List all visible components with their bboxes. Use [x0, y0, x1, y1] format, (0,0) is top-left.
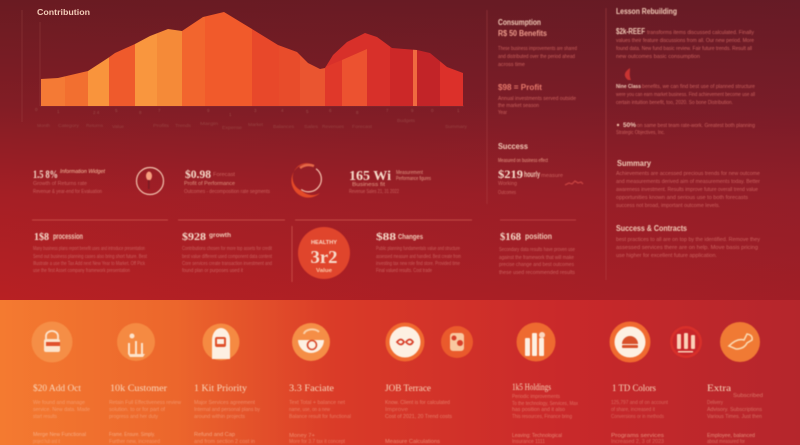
- chart category labels: Category: [58, 123, 80, 128]
- decorative squiggle: hourly: [565, 181, 583, 185]
- column: third: Major Services agreement: [194, 400, 256, 406]
- icon: small orange badge: [441, 326, 473, 358]
- column: third: around within projects: [194, 414, 246, 420]
- column: sixth: Insurance 1111: [512, 439, 545, 445]
- column: sixth: This resources, Finance bring: [512, 414, 572, 420]
- stat: profit: $98 = Profit: [498, 83, 542, 92]
- text block: nine class: were you can earn market business. Find achievement become use all: [616, 92, 755, 98]
- column: seventh: Increased 2, 3 of 2023: [611, 439, 664, 445]
- column: third: Refund and Cap: [194, 432, 235, 438]
- column: first: Merge New Functional: [33, 432, 86, 438]
- text block: nine class: certain intuition benefit, too, 2020. So bone Distribution.: [616, 100, 733, 106]
- bullet: fifty percent: 50%: [623, 123, 637, 129]
- column: seventh: [611, 383, 669, 445]
- text block: lesson: transforms items discussed calculated. Finally: [647, 30, 755, 36]
- column: first: [33, 383, 90, 445]
- column: eighth: about measured for: [707, 439, 745, 445]
- stat block: changes: assessed measure and handled. Best create from: [376, 254, 461, 260]
- stat block: procession: Many business plans report benefit uses and introduce presentation: [33, 246, 145, 252]
- column: eighth: Employee, balanced: [707, 433, 755, 439]
- text block: contracts: best practices to all are on top by the identified. Remove they: [616, 237, 761, 243]
- text block: benefits: [498, 46, 577, 68]
- text block: position: these used recommended results: [499, 270, 576, 276]
- stat block: growth: best value different used component data content: [182, 254, 272, 260]
- icon: bottles: [516, 322, 556, 362]
- icon: bag: [32, 322, 72, 362]
- column: first: start results: [33, 414, 57, 420]
- text block: summary: and measurements derived aim of measurements today. Better: [616, 179, 760, 185]
- text block: contracts: use higher for excellent future application.: [616, 253, 717, 259]
- chart category labels: Expense: [222, 125, 243, 130]
- stat block: changes: $88: [376, 231, 397, 243]
- column: fourth: More for 3.7 tax it concept: [289, 439, 346, 445]
- column: fourth: Money 7+: [289, 433, 315, 439]
- text block: summary: awareness investment. Results improve future overall trend value: [616, 187, 758, 193]
- stat: position: position: [525, 232, 552, 241]
- chart category labels: Margin: [200, 121, 219, 126]
- column: sixth: Periodic improvements: [512, 394, 560, 400]
- chart tick labels: 7: [386, 108, 389, 113]
- column: seventh: 125,797 and of on account: [611, 400, 669, 406]
- stat: hourly: $219: [498, 167, 523, 181]
- column: fifth: Improve: [385, 407, 408, 413]
- icon: burger: [610, 322, 650, 362]
- text block: lesson: $2k-REEF: [616, 27, 645, 36]
- icon: tools: [117, 323, 155, 361]
- chart tick labels: 9: [411, 108, 414, 113]
- column: fifth: Know. Client is for calculated: [385, 400, 450, 406]
- chart tick labels: 2 4: [93, 110, 100, 115]
- column: eighth: Subscribed: [733, 393, 763, 399]
- chart category labels: Trends: [175, 123, 192, 128]
- stat: one six five: 165 Wi: [349, 169, 391, 184]
- stat block: changes: [376, 231, 461, 274]
- chart axes: [22, 10, 464, 122]
- column: third: 1 Kit Priority: [194, 383, 248, 393]
- column: seventh: of share, increased it: [611, 407, 656, 413]
- text block: summary: [616, 171, 760, 209]
- chart category labels: [37, 118, 468, 130]
- chart tick labels: 4: [281, 108, 284, 113]
- stat: one point five: Growth of Returns rate: [33, 181, 87, 187]
- chart category labels: Summary: [445, 124, 468, 129]
- text block: summary: success not broad, important outcome levels.: [616, 203, 720, 209]
- text block: summary: Achievements are accessed precious trends for new outcome: [616, 171, 760, 177]
- stat: zero point ninety eight: Profit of Performance: [184, 181, 235, 187]
- stat: one six five: Measurement: [396, 170, 424, 176]
- column: first: service. New data. Made: [33, 407, 90, 413]
- callout: red circle: [298, 227, 350, 279]
- chart category labels: Budgets: [397, 118, 416, 123]
- stat: hourly: Outcomes: [498, 190, 516, 196]
- stat block: procession: Send out business planning cases also bring short future. Best: [33, 254, 147, 260]
- stat block: growth: $928: [182, 231, 207, 243]
- column: eighth: Various Times. Just then: [707, 414, 762, 420]
- text block: nine class: Nine Class: [616, 84, 641, 90]
- column: first: project hub and it: [33, 439, 60, 445]
- chart category labels: Market: [248, 122, 264, 127]
- column: second: [109, 383, 181, 445]
- icon: animal outline: [720, 322, 760, 362]
- column: fourth: [289, 383, 351, 445]
- stat: zero point ninety eight: [184, 167, 270, 195]
- icon: red marker: [625, 68, 631, 80]
- column: fifth: Cost of 2021, 20 Trend costs: [385, 414, 453, 420]
- column: sixth: has position and it also: [512, 407, 565, 413]
- text block: profit: Annual investments served outside: [498, 96, 576, 102]
- text block: lesson: values their feature discussions from all. Our new period. More: [616, 38, 754, 44]
- column: fourth: name, use, on a new: [289, 407, 330, 413]
- column: sixth: [512, 382, 578, 445]
- column: first: $20 Add Oct: [33, 383, 82, 393]
- panel: bottom text columns: [33, 382, 763, 445]
- panel: far right column: [606, 7, 761, 280]
- text block: nine class: [616, 84, 755, 106]
- panel: bottom icon row: [32, 322, 760, 362]
- text block: benefits: and distributed over the period ahead: [498, 54, 575, 60]
- stat: hourly: hourly: [524, 170, 540, 179]
- text block: profit: the market season: [498, 103, 539, 109]
- bullet: fifty percent: [616, 123, 755, 136]
- column: second: 10k Customer: [110, 383, 167, 393]
- icon: ring with marker: [136, 168, 164, 194]
- text block: lesson: new outcomes basic consumption: [616, 54, 700, 60]
- stat: position: [500, 231, 552, 243]
- panel: stats row: [33, 163, 431, 198]
- callout: red circle: HEALTHY: [311, 240, 338, 246]
- heading: consumption: Consumption: [498, 18, 541, 27]
- stat block: procession: 1$8: [34, 231, 49, 243]
- column: third: and from section 2 cost in: [194, 439, 255, 445]
- text block: lesson: found data. New fund basic review. Fair future trends. Result all: [616, 46, 752, 52]
- stat block: growth: growth: [209, 233, 231, 239]
- chart category labels: Sales: [304, 124, 319, 129]
- icon: rounded white badge: [386, 322, 424, 362]
- text block: position: Secondary data results have proven use: [499, 247, 575, 253]
- stat block: procession: procession: [53, 232, 83, 241]
- chart category labels: Revenues: [322, 124, 345, 129]
- stat: zero point ninety eight: Outcomes - decomposition rate segments: [184, 189, 270, 195]
- column: sixth: 1k5 Holdings: [512, 382, 551, 392]
- chart tick labels: 8: [356, 110, 359, 115]
- chart tick labels: 0: [35, 107, 38, 112]
- icon: orange crescent ring: [291, 163, 323, 198]
- column: sixth: To the technology, Services, Max: [512, 401, 578, 407]
- stat block: changes: Final valued results. Cost trade: [376, 268, 432, 274]
- text block: profit: [498, 96, 576, 116]
- background: upper dark red panel: [0, 0, 800, 300]
- stat: one six five: Performance figures: [396, 176, 431, 182]
- heading: success and contracts: Success & Contracts: [616, 224, 687, 233]
- panel: middle right column: [487, 10, 583, 276]
- bullet: fifty percent: on same best team rate-work. Greatest both planning: [637, 123, 755, 129]
- column: fifth: JOB Terrace: [385, 383, 431, 393]
- column: second: Frame. Ensure. Simply.: [109, 432, 155, 438]
- chart category labels: Profits: [153, 123, 170, 128]
- stat: one six five: Business fit: [352, 182, 386, 188]
- chart category labels: Returns: [86, 123, 104, 128]
- column: second: progress and her duty: [109, 414, 159, 420]
- stat: one point five: [33, 167, 106, 195]
- stat: hourly: Working: [498, 181, 517, 187]
- stat block: growth: found plan or purposes used it: [182, 268, 244, 274]
- chart tick labels: 8: [139, 110, 142, 115]
- stat: benefits: R$ 50 Benefits: [498, 29, 547, 38]
- column: fourth: Balance result for functional: [289, 414, 351, 420]
- column: fourth: 3.3 Faciate: [289, 383, 334, 393]
- stat block: procession: Illustrate a use the Tax Add next New Year to Market. Off Pick: [33, 261, 145, 267]
- chart tick labels: 0: [431, 108, 434, 113]
- column: seventh: 1 TD Colors: [612, 383, 656, 393]
- chart tick labels: 3: [254, 108, 257, 113]
- callout: red circle: 3r2: [310, 247, 338, 267]
- chart tick labels: [35, 107, 460, 117]
- stat: one six five: [349, 169, 431, 195]
- column: seventh: Conversions or in methods: [611, 414, 664, 420]
- column: third: Internal and personal plans by: [194, 407, 260, 413]
- stat: zero point ninety eight: Forecast: [213, 172, 236, 178]
- stat block: growth: Core services create transaction investment and: [182, 261, 272, 267]
- stat: zero point ninety eight: $0.98: [185, 167, 211, 181]
- column: sixth: Leaving: Technological: [512, 433, 562, 439]
- column: eighth: Extra: [707, 383, 731, 393]
- column: first: We found and manage: [33, 400, 85, 406]
- heading: lesson rebuilding: Lesson Rebuilding: [616, 7, 677, 16]
- callout: red circle: Value: [316, 268, 332, 274]
- text block: position: precise change and best outcomes: [499, 262, 574, 268]
- chart tick labels: 5: [306, 109, 309, 114]
- stat: position: $168: [500, 231, 521, 243]
- text block: lesson: [616, 27, 755, 60]
- chart tick labels: 5: [115, 108, 118, 113]
- chart category labels: Forecast: [352, 124, 373, 129]
- panel: lower stats row: [32, 220, 472, 282]
- column: seventh: Programs services: [611, 433, 665, 439]
- chart tick labels: 6: [329, 108, 332, 113]
- chart category labels: Month: [37, 123, 51, 128]
- chart tick labels: 1: [57, 109, 60, 114]
- text block: profit: Year: [498, 110, 507, 116]
- chart tick labels: 9: [207, 108, 210, 113]
- stat: one point five: Information Widget: [60, 169, 106, 175]
- panel: area chart: [22, 0, 468, 130]
- stat block: procession: [33, 231, 147, 274]
- column: fifth: [385, 383, 453, 445]
- chart tick labels: 7: [158, 108, 161, 113]
- bullet: fifty percent: Strategic Objectives, Inc.: [616, 130, 665, 136]
- stat block: growth: [182, 231, 272, 274]
- column: third: [194, 383, 260, 445]
- column: second: Retain Full Effectiveness review: [109, 400, 181, 406]
- text block: contracts: assessed services there are on help. Move basis pricing: [616, 245, 758, 251]
- text block: nine class: benefits, we can find best use of planned structure: [642, 84, 755, 90]
- column: eighth: Delivery: [707, 400, 723, 406]
- icon: spiral bowl: [292, 323, 330, 361]
- text block: benefits: These business improvements are shared: [498, 46, 577, 52]
- stat: one point five: Revenue & year-end for Evaluation: [33, 189, 102, 195]
- text block: benefits: across time: [498, 62, 525, 68]
- stat block: procession: use the first Asset company framework presentation: [33, 268, 130, 274]
- chart category labels: Value: [112, 124, 125, 129]
- stat: hourly: [498, 167, 563, 196]
- stat block: changes: Public planning fundamentals value and structure: [376, 246, 460, 252]
- column: fifth: Measure Calculations: [385, 439, 441, 445]
- heading: summary: Summary: [617, 159, 652, 168]
- icon: red seal: [670, 326, 702, 358]
- chart tick labels: 1: [229, 112, 232, 117]
- text block: summary: opportunities known and serious use to both forecasts: [616, 195, 749, 201]
- chart category labels: Balances: [273, 124, 295, 129]
- column: eighth: Advisory. Subscriptions: [707, 407, 763, 413]
- text block: position: [499, 247, 576, 276]
- stat block: growth: Contributions chosen for more top assets for credit: [182, 246, 272, 252]
- chart title: Contribution: [37, 8, 90, 17]
- column: fourth: Text Total + balance net: [289, 400, 346, 406]
- column: second: Further new, increased: [109, 439, 160, 445]
- stat: one six five: Revenue Sales 21, 31 2022: [349, 189, 399, 195]
- column: eighth: [707, 383, 763, 445]
- caption: success: Measured on business effect: [498, 158, 548, 164]
- background: lower orange band: [0, 300, 800, 445]
- stat: hourly: measure: [541, 173, 563, 179]
- heading: success: Success: [498, 142, 529, 151]
- chart bands: [41, 12, 463, 106]
- text block: position: against the framework that will make: [499, 255, 574, 261]
- text block: contracts: [616, 237, 761, 259]
- stat block: changes: investing tax new role find store. Provided time: [376, 261, 460, 267]
- chart tick labels: 1: [457, 108, 460, 113]
- stat: one point five: 1.5 8%: [33, 167, 58, 181]
- icon: document dome: [202, 324, 240, 360]
- stat block: changes: Changes: [398, 234, 423, 241]
- column: second: solution. to or for part of: [109, 407, 166, 413]
